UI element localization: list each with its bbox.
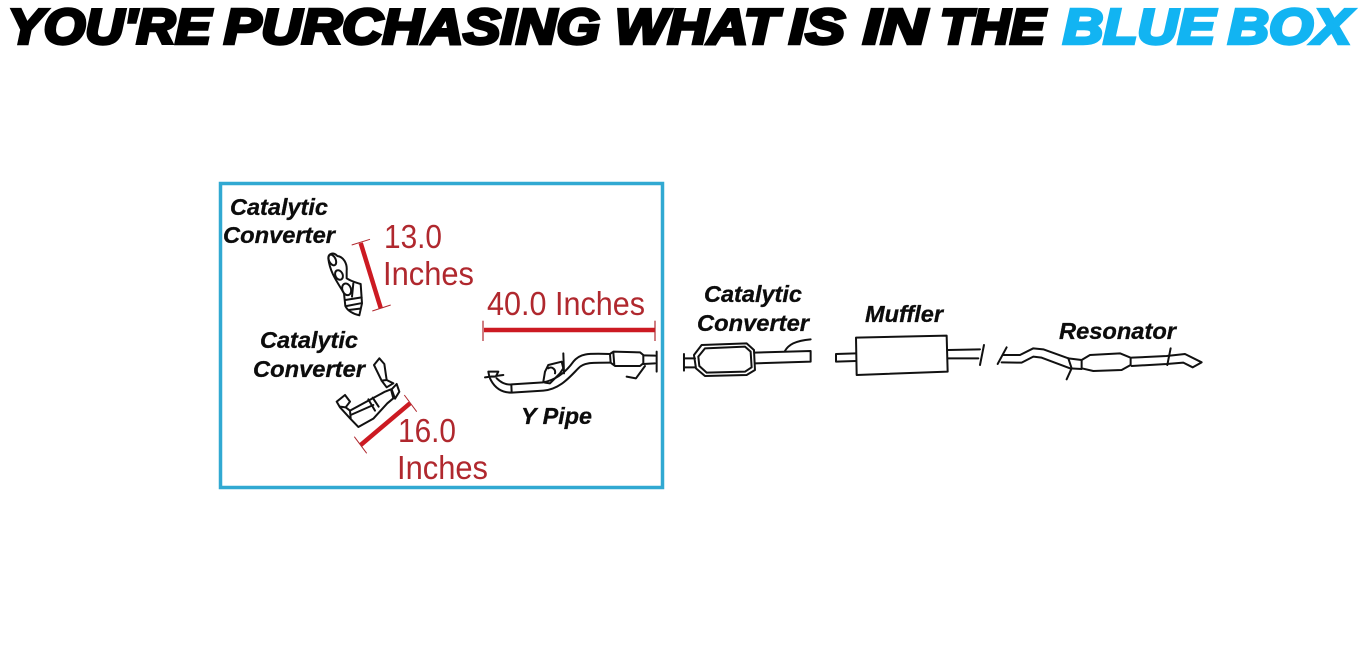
dimension: 13.0 inches: 13.0 bbox=[384, 218, 442, 255]
title: WHAT bbox=[615, 0, 783, 54]
label: upper catalytic converter: Catalytic bbox=[230, 194, 328, 220]
label: third catalytic converter: Converter bbox=[697, 310, 811, 336]
title: THE bbox=[940, 0, 1046, 54]
title: BLUE bbox=[1063, 0, 1216, 54]
title: IN bbox=[863, 0, 929, 54]
title: IS bbox=[789, 0, 845, 54]
dimension: 13.0 inches: Inches bbox=[383, 255, 474, 292]
title: PURCHASING bbox=[224, 0, 600, 54]
dimension: 16.0 inches bbox=[354, 395, 488, 486]
label: lower catalytic converter: Converter bbox=[253, 356, 367, 382]
label: upper catalytic converter: Converter bbox=[223, 222, 337, 248]
icon: upper catalytic converter manifold bbox=[327, 253, 362, 315]
title: YOU'RE bbox=[8, 0, 212, 54]
dimension: 13.0 inches bbox=[352, 218, 474, 311]
label: muffler: Muffler bbox=[865, 301, 945, 327]
dimension: 16.0 inches: 16.0 bbox=[398, 412, 456, 449]
title: BOX bbox=[1228, 0, 1355, 54]
title bbox=[8, 0, 1355, 54]
dimension: 16.0 inches: Inches bbox=[397, 449, 488, 486]
icon: Y pipe bbox=[485, 352, 657, 393]
label: lower catalytic converter: Catalytic bbox=[260, 327, 358, 353]
label: third catalytic converter: Catalytic bbox=[704, 281, 802, 307]
icon: lower catalytic converter manifold bbox=[337, 358, 399, 427]
dimension: 40.0 inches: 40.0 Inches bbox=[487, 285, 645, 322]
label: Y pipe: Y Pipe bbox=[521, 403, 592, 429]
icon: third catalytic converter bbox=[684, 339, 811, 376]
icon: muffler bbox=[836, 336, 984, 375]
panel: blue box bbox=[220, 184, 662, 488]
icon: resonator bbox=[998, 347, 1202, 379]
label: resonator: Resonator bbox=[1059, 318, 1178, 344]
